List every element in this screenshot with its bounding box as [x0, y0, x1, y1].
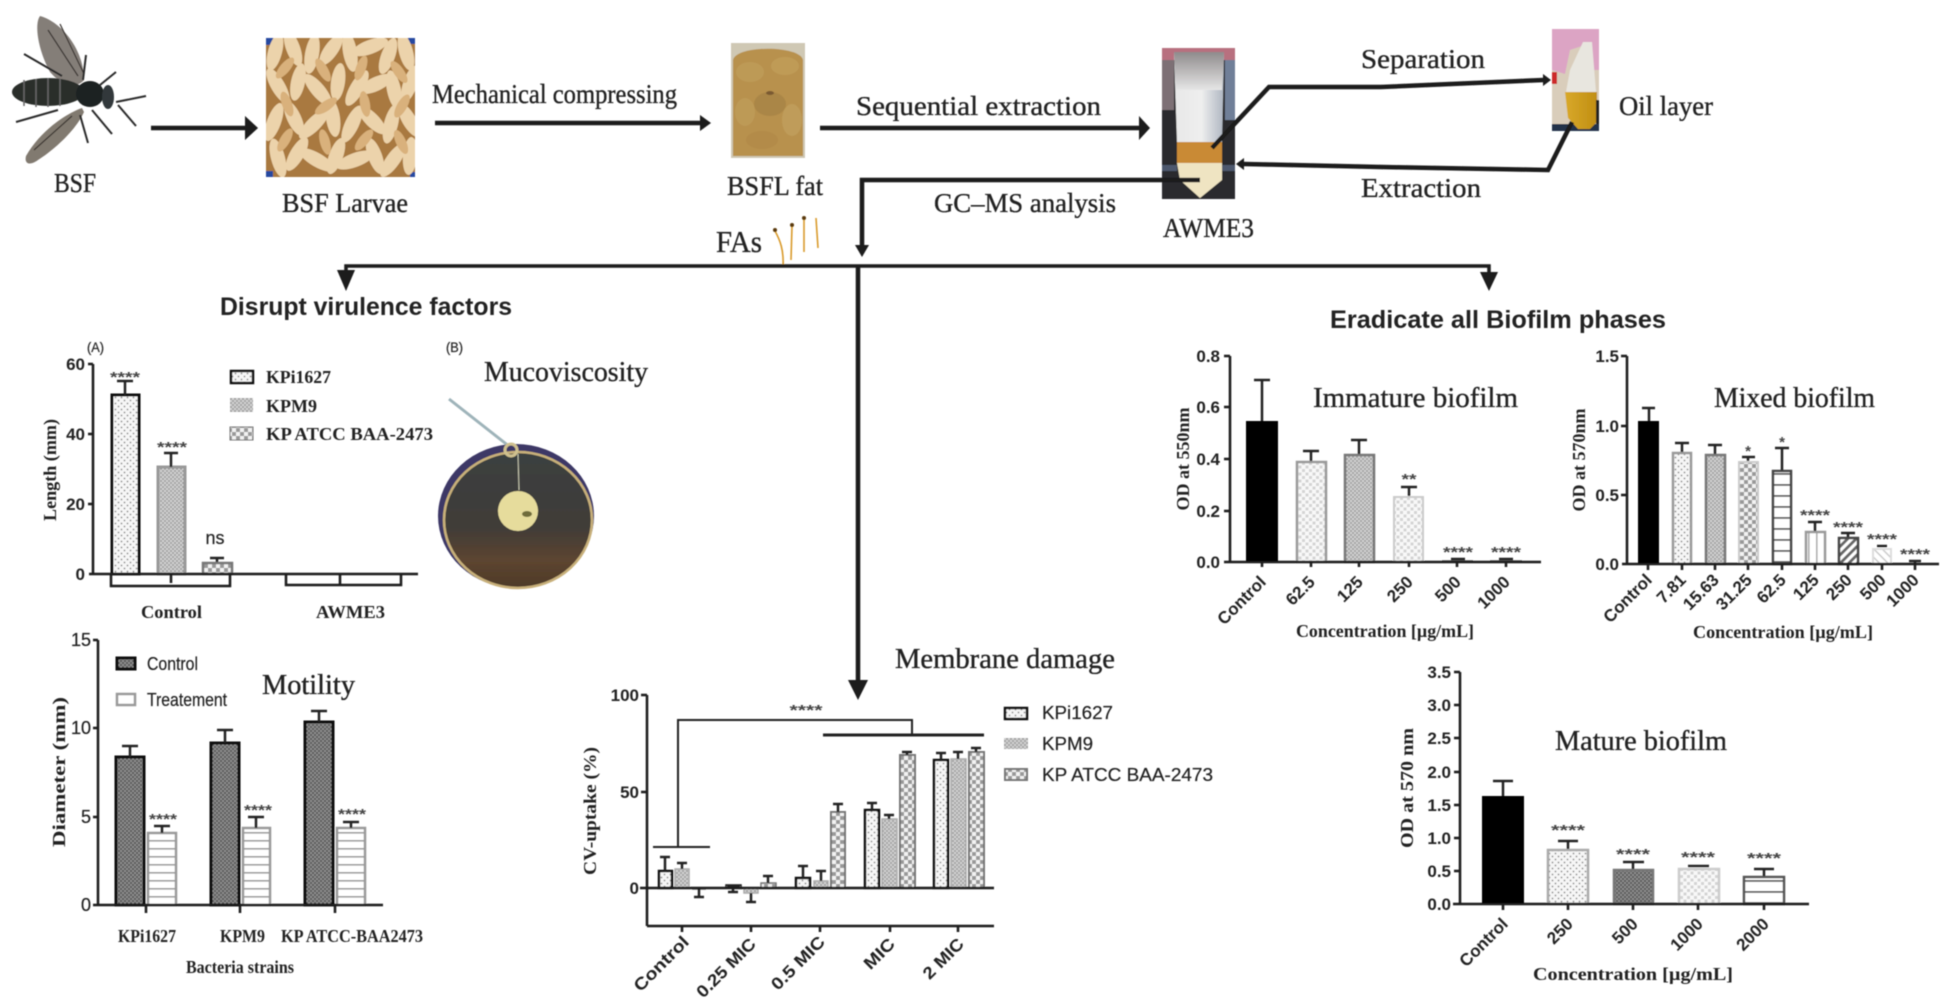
y axis with ticks: 0.0 [1595, 555, 1619, 574]
x labels [1600, 570, 1923, 627]
y axis with ticks: 0.6 [1196, 398, 1220, 417]
x axis [1224, 562, 1541, 567]
x labels [1456, 914, 1773, 971]
x labels: KPi1627 [118, 926, 176, 946]
panel: motility bar chart [49, 630, 423, 977]
x labels [630, 932, 968, 1002]
x labels: 7.81 [1653, 570, 1690, 607]
significance stars: **** [1900, 546, 1930, 563]
x axis with group brackets [89, 574, 418, 586]
photo: BSF larvae [265, 37, 416, 178]
x labels: 125 [1333, 572, 1367, 606]
bars [1638, 408, 1921, 564]
y axis with ticks: 1.0 [1427, 829, 1451, 848]
panel: mature biofilm bar chart [1397, 663, 1809, 984]
significance brackets: **** [790, 702, 823, 719]
x labels: Control [1600, 570, 1656, 627]
label: Separation: Separation [1361, 44, 1486, 74]
x labels: 0.25 MIC [693, 934, 760, 1002]
significance labels [110, 369, 225, 548]
x labels: Control [141, 602, 202, 622]
x labels: AWME3 [316, 602, 385, 622]
treatment bars [148, 817, 365, 905]
y axis with ticks: 0 [81, 895, 91, 915]
significance stars: **** [244, 802, 272, 819]
label: Oil layer: Oil layer [1619, 91, 1713, 121]
x axis title: Bacteria strains [186, 957, 294, 977]
bars: Control group [112, 381, 232, 574]
control bars [116, 711, 333, 905]
x labels: KPM9 [220, 926, 265, 946]
y axis title: Length (mm) [40, 419, 61, 521]
significance stars: **** [1551, 822, 1585, 839]
y axis with ticks: 20 [66, 495, 85, 514]
y axis with ticks: 0.8 [1196, 347, 1220, 366]
legend: KP ATCC BAA-2473 [266, 424, 433, 444]
significance stars: **** [1616, 846, 1650, 863]
heading: Disrupt virulence factors: Disrupt virulence factors [220, 293, 512, 321]
x labels: 500 [1608, 914, 1642, 948]
y axis with ticks: 10 [71, 718, 91, 738]
x labels: Control [1456, 914, 1512, 971]
arrow: oil layer back to tube [1236, 122, 1572, 170]
bars: KPi1627 [659, 753, 948, 892]
significance labels: **** [157, 439, 187, 456]
label: Mechanical compressing: Mechanical compressing [432, 79, 677, 109]
title: Immature biofilm: Immature biofilm [1313, 383, 1518, 414]
x labels: 62.5 [1282, 572, 1319, 609]
x labels: 1000 [1474, 572, 1514, 613]
y axis with ticks: 2.0 [1427, 763, 1451, 782]
x labels: 1000 [1883, 570, 1923, 611]
legend: KPM9 [1042, 734, 1093, 754]
panel: mixed biofilm bar chart [1569, 347, 1939, 642]
panel: membrane damage bar chart [580, 644, 1213, 1002]
bars [1246, 380, 1522, 562]
y axis with ticks: 0.0 [1196, 553, 1220, 572]
y axis with ticks: 40 [66, 425, 85, 444]
x labels: 250 [1543, 914, 1577, 948]
x labels [1214, 572, 1514, 629]
legend: KPM9 [266, 396, 317, 416]
y axis with ticks: 0.5 [1595, 486, 1619, 505]
x labels: 1000 [1667, 914, 1707, 955]
y axis with ticks: 0 [76, 565, 85, 584]
x labels: 0.5 MIC [767, 932, 829, 994]
significance stars: **** [149, 811, 177, 828]
significance labels: **** [110, 369, 140, 386]
label: BSFL fat: BSFL fat [727, 171, 823, 201]
significance stars [149, 802, 366, 828]
significance stars [1551, 822, 1781, 867]
y axis title: CV-uptake (%) [580, 747, 601, 875]
significance stars [1745, 434, 1930, 563]
x labels: MIC [860, 934, 899, 973]
panel letter B: (B) [446, 339, 463, 355]
y axis with ticks: 0.0 [1427, 895, 1451, 914]
x labels: 500 [1856, 570, 1890, 604]
arrow: down to membrane damage [848, 266, 868, 700]
y axis with ticks: 15 [71, 630, 91, 650]
panel: hypermucoviscosity bar chart A [40, 339, 433, 622]
title: Mixed biofilm: Mixed biofilm [1714, 383, 1875, 414]
y axis with ticks: 0 [630, 879, 639, 898]
label: FAs: FAs [716, 224, 762, 259]
x axis [93, 905, 383, 913]
photo: agar plate with loop [438, 399, 594, 588]
y axis with ticks: 0.5 [1427, 862, 1451, 881]
x labels: 31.25 [1712, 570, 1756, 614]
x axis [640, 888, 994, 932]
panel: mucoviscosity string test [438, 339, 648, 588]
significance stars: **** [1443, 544, 1473, 561]
label: Sequential extraction: Sequential extraction [856, 91, 1102, 121]
significance stars: ** [1402, 471, 1417, 488]
icon: black soldier fly [12, 16, 146, 163]
x labels [141, 602, 385, 622]
workflow: top extraction process [12, 16, 1713, 700]
x labels: KP ATCC-BAA2473 [281, 926, 423, 946]
bars: KPM9 [675, 752, 966, 902]
y axis with ticks: 50 [620, 783, 639, 802]
x axis [1622, 564, 1939, 570]
title: Mucoviscosity: Mucoviscosity [484, 357, 648, 388]
legend: KPi1627 [266, 367, 331, 387]
x labels: Control [1214, 572, 1270, 629]
y axis with ticks: 60 [66, 355, 85, 374]
y axis with ticks [66, 355, 93, 584]
x axis [1453, 904, 1809, 910]
panel: immature biofilm bar chart [1173, 347, 1541, 641]
x axis title: Concentration [µg/mL] [1693, 622, 1873, 642]
arrow: tube to oil layer [1212, 74, 1551, 148]
y axis with ticks: 0.4 [1196, 450, 1221, 469]
legend [230, 367, 433, 444]
title: Motility: Motility [262, 670, 355, 701]
y axis with ticks [71, 630, 98, 915]
x labels [118, 926, 423, 946]
y axis with ticks: 1.5 [1427, 796, 1451, 815]
y axis with ticks [1595, 347, 1627, 574]
y axis with ticks [611, 686, 647, 926]
legend: KPi1627 [1042, 703, 1113, 723]
significance brackets [653, 702, 984, 847]
significance stars [1402, 471, 1521, 561]
y axis with ticks: 2.5 [1427, 729, 1451, 748]
arrow: main horizontal splitter [337, 266, 1498, 291]
y axis with ticks: 1.5 [1595, 347, 1619, 366]
icon: fatty acid tails [773, 216, 818, 267]
x labels: 500 [1431, 572, 1465, 606]
significance stars: **** [1800, 507, 1830, 524]
y axis title: Diameter (mm) [49, 697, 70, 847]
photo: AWME3 tube [1162, 48, 1235, 199]
y axis with ticks: 1.0 [1595, 417, 1619, 436]
y axis with ticks: 0.2 [1196, 502, 1220, 521]
significance stars: **** [1747, 850, 1781, 867]
photo: oil layer vial [1552, 29, 1599, 131]
x axis title: Concentration [µg/mL] [1296, 621, 1474, 641]
arrow: larvae to fat [435, 115, 711, 131]
significance labels: ns [205, 528, 225, 548]
bars: KP ATCC BAA-2473 [692, 748, 984, 897]
y axis with ticks [1427, 663, 1460, 914]
y axis with ticks: 5 [81, 807, 91, 827]
x labels: 125 [1789, 570, 1823, 604]
significance stars: **** [1491, 544, 1521, 561]
y axis title: OD at 570 nm [1397, 728, 1417, 848]
panel letter A: (A) [87, 339, 104, 355]
y axis title: OD at 550nm [1173, 407, 1193, 510]
significance stars: **** [1681, 849, 1715, 866]
y axis with ticks: 3.5 [1427, 663, 1451, 682]
significance stars: * [1779, 434, 1785, 451]
y axis with ticks: 3.0 [1427, 696, 1451, 715]
legend: Treatement [147, 690, 227, 710]
x labels: 250 [1822, 570, 1856, 604]
x labels: Control [630, 932, 693, 995]
significance stars: **** [1833, 519, 1863, 536]
x labels: 15.63 [1679, 570, 1723, 614]
x labels: 250 [1383, 572, 1417, 606]
label: Extraction: Extraction [1361, 173, 1482, 203]
significance stars: **** [1867, 531, 1897, 548]
y axis with ticks: 100 [611, 686, 639, 705]
label: AWME3: AWME3 [1163, 213, 1254, 243]
x labels: 62.5 [1753, 570, 1790, 607]
title: Membrane damage: Membrane damage [895, 644, 1115, 675]
x labels: 2 MIC [919, 934, 968, 983]
photo: BSFL fat [731, 43, 805, 158]
y axis title: OD at 570nm [1569, 408, 1589, 512]
legend: KP ATCC BAA-2473 [1042, 765, 1213, 785]
bars [1482, 781, 1784, 904]
legend: Control [147, 654, 198, 674]
significance stars: **** [338, 806, 366, 823]
label: BSF: BSF [54, 168, 96, 198]
label: GC-MS analysis: GC–MS analysis [934, 188, 1116, 218]
title: Mature biofilm: Mature biofilm [1555, 726, 1727, 757]
arrow: BSF to larvae [151, 116, 258, 140]
label: BSF Larvae: BSF Larvae [282, 188, 408, 218]
y axis with ticks [1196, 347, 1230, 572]
heading: Eradicate all Biofilm phases: Eradicate all Biofilm phases [1330, 306, 1666, 334]
x labels: 2000 [1733, 914, 1773, 955]
arrow: fat to AWME3 [820, 116, 1150, 140]
significance stars: * [1745, 443, 1751, 460]
x axis title: Concentration [µg/mL] [1533, 964, 1733, 984]
legend [1004, 703, 1213, 785]
legend [117, 654, 227, 710]
arrow: GC-MS line down to FAs [855, 180, 1200, 257]
